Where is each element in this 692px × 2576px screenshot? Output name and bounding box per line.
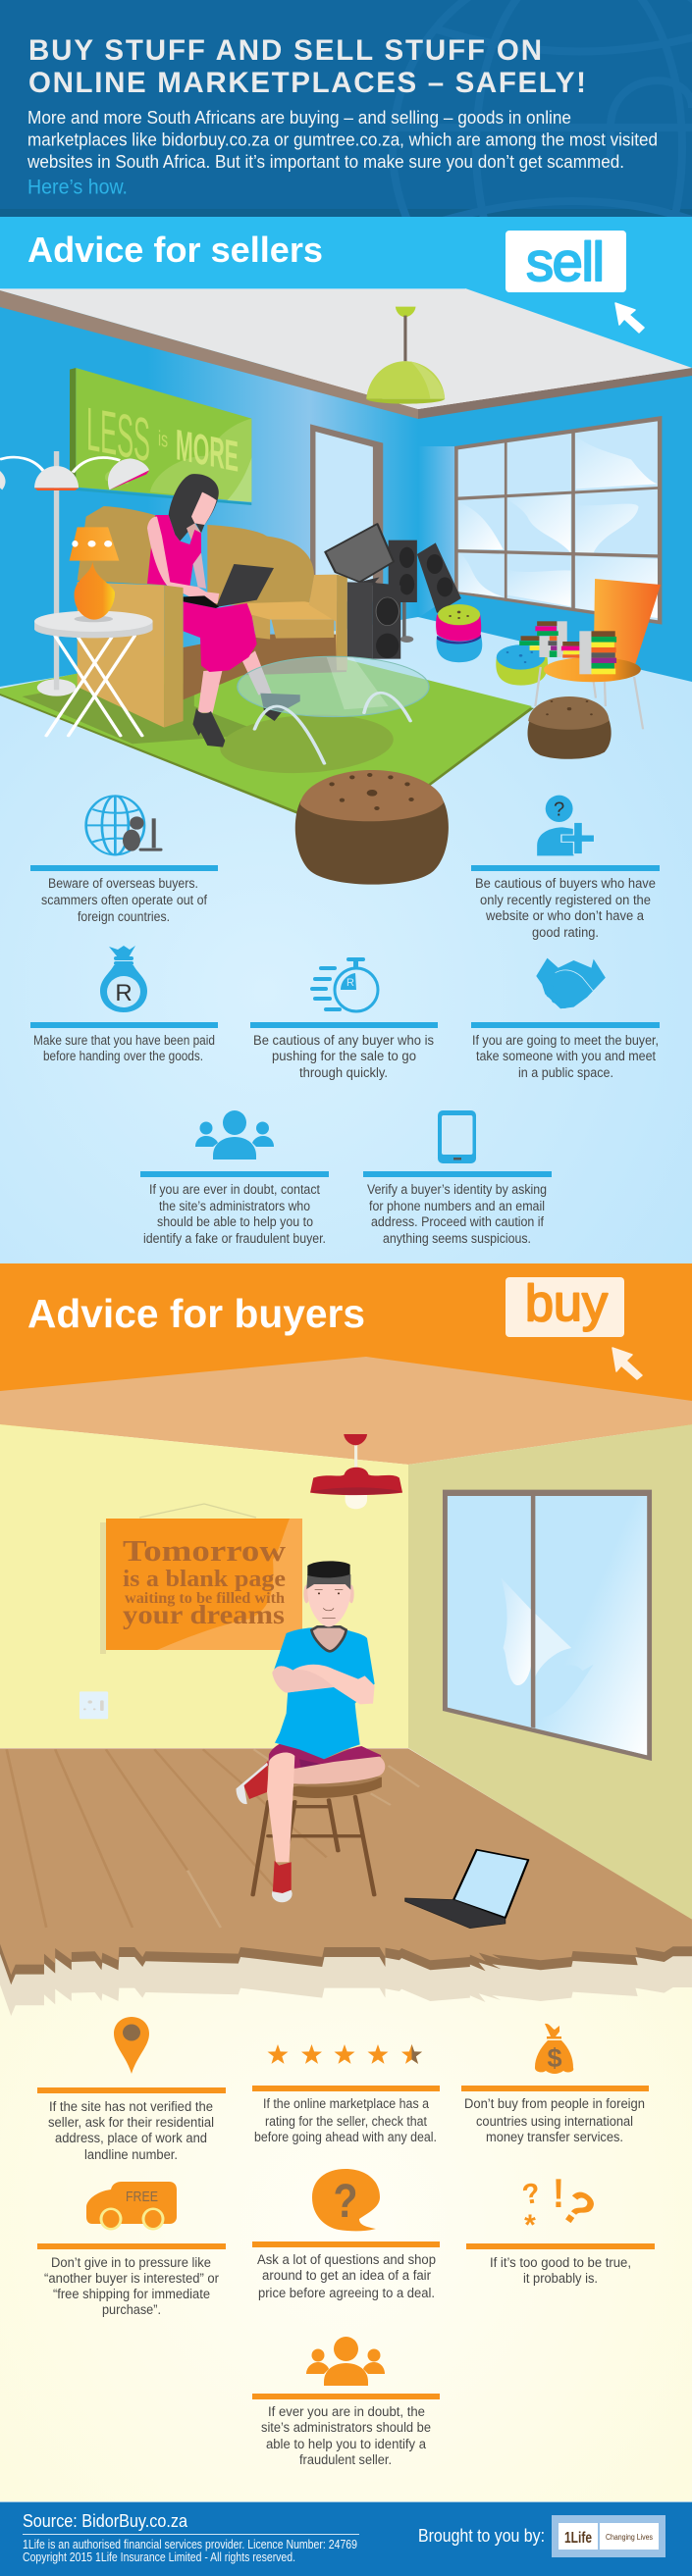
logo: 1Life: [552, 2515, 665, 2557]
large brown pouf: [295, 770, 449, 885]
illustration: room: [0, 1357, 692, 2016]
man sitting: [237, 1561, 385, 1902]
icon: punctuation symbols: !: [553, 2170, 564, 2216]
seller tip: verify identity: anything seems suspicious.: [383, 1231, 531, 1246]
icon: free shipping truck: FREE: [126, 2189, 158, 2205]
cream background: [0, 1923, 692, 2501]
icon: globe and person: [86, 796, 162, 854]
buyer tip: rating: If the online marketplace has a: [263, 2096, 429, 2111]
seller tip: overseas buyers: foreign countries.: [78, 909, 170, 924]
icon: dollar money bag: [535, 2024, 573, 2074]
buyer tip: pressure: [37, 2182, 226, 2317]
stacks of books: [519, 621, 616, 674]
poster lettering: LESS: [86, 394, 150, 475]
seller tip: verify identity: Verify a buyer’s identity by asking: [367, 1182, 547, 1197]
seller tip: contact administrators: the site’s administrators who: [159, 1199, 310, 1213]
wall socket: [80, 1691, 108, 1719]
seller tip: overseas buyers: [30, 796, 218, 924]
buyer tip: pressure: “free shipping for immediate: [53, 2287, 210, 2301]
icon: stopwatch: R: [346, 977, 354, 989]
icon: stopwatch: [310, 957, 378, 1011]
brown pouf: [527, 696, 612, 759]
icon: map pin: [114, 2017, 149, 2074]
intro text: websites in South Africa. But it’s important to make sure you don’t get scammed.: [27, 152, 624, 172]
title: [28, 34, 586, 99]
icon: handshake: [536, 958, 606, 1008]
buyer tip: too good to be true: If it’s too good to be true,: [490, 2255, 631, 2270]
globe watermark: [399, 209, 692, 217]
icon: star rating: [267, 2044, 422, 2064]
buy button: buy: [525, 1275, 608, 1332]
legal text: [23, 2538, 357, 2564]
icon: punctuation symbols: *: [524, 2209, 536, 2241]
sofa: [78, 506, 347, 699]
icon: punctuation symbols: ?: [520, 2178, 543, 2211]
seller tip: public meeting: take someone with you and meet: [476, 1049, 656, 1063]
seller tip: pushy buyer: [250, 957, 438, 1080]
rug: [0, 653, 534, 814]
buy button: [506, 1275, 624, 1337]
buyer tip: too good to be true: it probably is.: [523, 2271, 598, 2286]
door: [310, 424, 383, 601]
illustration: living room: MORE: [176, 421, 239, 482]
panel: advice for buyers: [0, 1263, 692, 2501]
seller tip: verify identity: [363, 1110, 552, 1246]
laptop: [405, 1850, 528, 1929]
buyer tip: pressure: Don’t give in to pressure like: [51, 2255, 211, 2270]
legal text: 1Life is an authorised financial services provider. Licence Number: 24769: [23, 2538, 357, 2551]
buyer tip: verify seller address: seller, ask for their residential: [48, 2115, 214, 2130]
poster: tomorrow is a blank page: is a blank page: [123, 1567, 286, 1592]
sell button: sell: [526, 231, 605, 292]
seller tip: overseas buyers: Beware of overseas buyers.: [48, 876, 198, 891]
seller tip: recently registered: Be cautious of buyers who have: [475, 876, 656, 891]
illustration: living room: [0, 288, 692, 1263]
seller tip: recently registered: website or who don’t have a: [485, 908, 644, 923]
buyer tip: rating: before going ahead with any deal.: [254, 2130, 437, 2144]
icon: question speech bubble: [312, 2169, 380, 2231]
buyer tip: ask questions: Ask a lot of questions and shop: [257, 2252, 436, 2267]
stool: [253, 1776, 382, 1895]
sofa left arm: [78, 582, 184, 728]
seller tip: public meeting: If you are going to meet the buyer,: [472, 1033, 659, 1048]
seller tip: pushy buyer: pushing for the sale to go: [272, 1049, 416, 1063]
icon: cursor: [615, 303, 644, 333]
right wall: [408, 1424, 692, 1920]
icon: dollar money bag: $: [547, 2043, 562, 2073]
buyer tip: contact administrators: site’s administrators should be: [261, 2420, 431, 2435]
floor lamp: [0, 451, 149, 696]
seller tip: recently registered: good rating.: [532, 925, 599, 940]
buyer tip: ask questions: around to get an idea of a fair: [262, 2268, 431, 2283]
pink and blue poufs: [436, 604, 482, 662]
icon: person with plus: [537, 796, 595, 855]
intro text: [27, 108, 658, 172]
seller tip: contact administrators: should be able to help you to: [157, 1214, 313, 1229]
buyer tip: contact administrators: able to help you to identify a: [266, 2437, 426, 2451]
brought to you by: Brought to you by:: [418, 2526, 545, 2546]
poster: tomorrow is a blank page: your dreams: [123, 1600, 285, 1629]
floor: [0, 617, 692, 1263]
buyer tip: pressure: purchase”.: [102, 2302, 161, 2317]
seller tip: contact administrators: If you are ever in doubt, contact: [149, 1182, 320, 1197]
buyer tip: too good to be true: [466, 2170, 655, 2286]
seller tip: contact administrators: identify a fake or fraudulent buyer.: [143, 1231, 326, 1246]
seller tip: recently registered: [471, 796, 660, 940]
icon: free shipping truck: [86, 2182, 177, 2231]
buyer tip: ask questions: [252, 2169, 440, 2300]
ceiling: [0, 288, 692, 419]
intro text: marketplaces like bidorbuy.co.za or gumtree.co.za, which are among the most visited: [27, 129, 658, 149]
side table: [34, 611, 153, 736]
buyer tip: contact administrators: If ever you are in doubt, the: [268, 2404, 425, 2419]
poster: tomorrow is a blank page: waiting to be filled with: [125, 1590, 285, 1607]
buyer tip: rating: rating for the seller, check that: [265, 2114, 427, 2129]
poster: tomorrow is a blank page: [100, 1504, 302, 1654]
intro text: More and more South Africans are buying – and selling – goods in online: [27, 108, 571, 128]
buyer tip: verify seller address: [37, 2017, 226, 2162]
seller tip: contact administrators: [140, 1110, 329, 1246]
poster lettering: is: [158, 426, 168, 452]
icon: punctuation symbols: ?: [551, 2180, 605, 2239]
front leg and shoe: [267, 1752, 294, 1902]
seller tip: public meeting: [471, 958, 660, 1080]
seller tip: pushy buyer: Be cautious of any buyer who is: [253, 1033, 434, 1048]
woman upper body: [147, 474, 274, 713]
seller tip: public meeting: in a public space.: [518, 1065, 613, 1080]
footer: [0, 2501, 692, 2576]
left wall: [0, 1424, 408, 1748]
seller tip: recently registered: only recently registered on the: [480, 893, 651, 907]
rug shadows: [22, 684, 397, 778]
icon: people group: [306, 2337, 385, 2386]
buyer tip: verify seller address: If the site has not verified the: [49, 2099, 213, 2114]
title: BUY STUFF AND SELL STUFF ON: [28, 34, 542, 67]
title: ONLINE MARKETPLACES – SAFELY!: [28, 67, 586, 99]
glass coffee table: [238, 656, 429, 763]
logo: 1Life: 1Life: [564, 2530, 592, 2547]
lamp: red pendant: [310, 1434, 402, 1509]
seller tip: get paid first: [30, 946, 218, 1063]
back shoe: [237, 1761, 268, 1804]
buyer tip: foreign money transfers: countries using international: [476, 2114, 633, 2129]
table lamp: [70, 527, 119, 622]
buyer tip: foreign money transfers: [461, 2024, 649, 2144]
ceiling: [0, 1357, 692, 1465]
buyer tip: rating: [252, 2044, 440, 2144]
buyer tip: verify seller address: landline number.: [84, 2147, 178, 2162]
panel: advice for sellers: [0, 217, 692, 1263]
logo: 1Life: Changing Lives: [606, 2533, 653, 2542]
buyer tip: foreign money transfers: Don’t buy from people in foreign: [464, 2096, 645, 2111]
boots: [192, 694, 300, 747]
poster: tomorrow is a blank page: Tomorrow: [123, 1533, 287, 1568]
icon: question speech bubble: ?: [334, 2176, 357, 2228]
buyer tip: contact administrators: fraudulent seller.: [299, 2452, 392, 2467]
sell button: [506, 231, 626, 292]
heading: advice for sellers: Advice for sellers: [27, 230, 323, 270]
orange chair: [535, 579, 661, 729]
legal text: Copyright 2015 1Life Insurance Limited - All rights reserved.: [23, 2550, 295, 2564]
seller tip: overseas buyers: scammers often operate out of: [41, 893, 207, 907]
seller tip: pushy buyer: through quickly.: [299, 1065, 388, 1080]
buyer tip: foreign money transfers: money transfer services.: [486, 2130, 623, 2144]
window: [443, 1490, 652, 1761]
torn floor: [0, 1748, 692, 2016]
walls: [0, 304, 692, 706]
window: [454, 416, 662, 625]
band: [0, 217, 692, 374]
icon: punctuation symbols: [520, 2170, 605, 2241]
header panel: [0, 0, 692, 217]
seller tip: verify identity: address. Proceed with caution if: [371, 1214, 544, 1229]
icon: people group: [195, 1110, 274, 1159]
icon: rand money bag: [100, 946, 147, 1012]
green pouf: [496, 644, 548, 686]
icon: cursor: [612, 1348, 642, 1379]
buyer tip: contact administrators: [252, 2337, 440, 2467]
icon: rand money bag: R: [115, 980, 133, 1006]
source: Source: BidorBuy.co.za: [23, 2511, 188, 2531]
icon: person with plus: ?: [554, 799, 564, 821]
torso and arms: [268, 1561, 385, 1784]
speakers and monitor: [325, 524, 461, 659]
seller tip: verify identity: for phone numbers and an email: [369, 1199, 545, 1213]
buyer tip: ask questions: price before agreeing to a deal.: [258, 2286, 435, 2300]
poster: less is more: [70, 368, 251, 505]
heading: advice for buyers: Advice for buyers: [27, 1291, 365, 1336]
poster lettering: [88, 408, 238, 471]
buyer tip: pressure: “another buyer is interested” or: [44, 2271, 219, 2286]
here's how: Here’s how.: [27, 177, 128, 198]
buyer tip: verify seller address: address, place of work and: [55, 2131, 207, 2145]
seller tip: get paid first: before handing over the goods.: [43, 1049, 203, 1063]
icon: phone: [438, 1110, 476, 1163]
seller tip: get paid first: Make sure that you have been paid: [33, 1033, 215, 1048]
lamp: ceiling pendant: [366, 307, 445, 404]
band: [0, 1263, 692, 1430]
